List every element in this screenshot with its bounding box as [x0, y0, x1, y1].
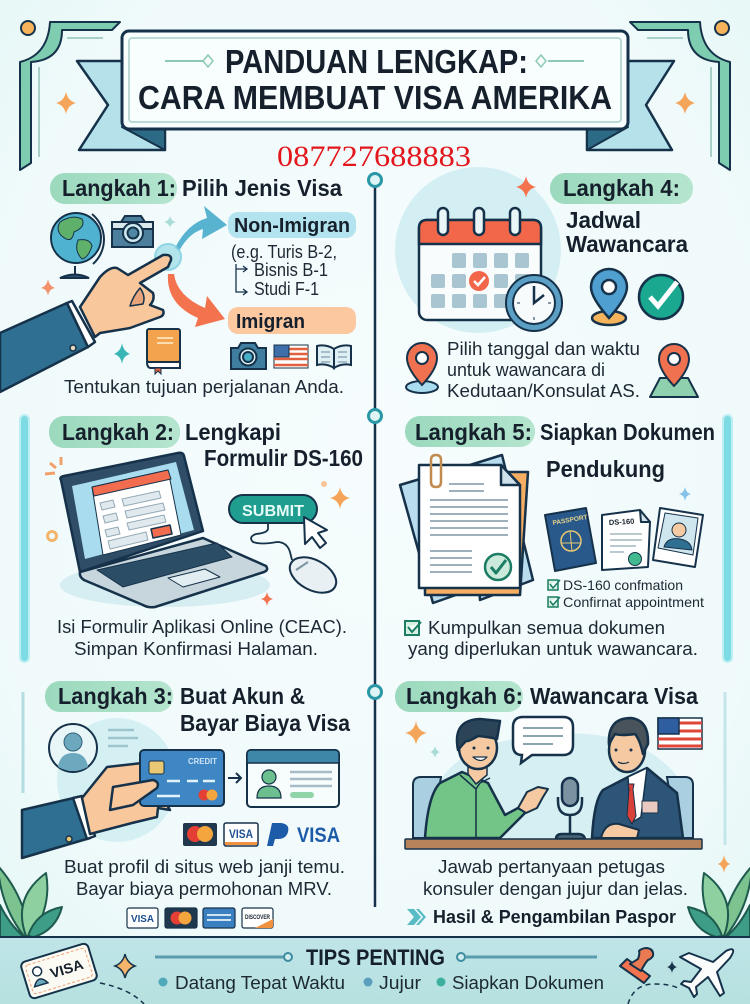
- step 4 caption: untuk wawancara di: [447, 360, 605, 380]
- shadow: [60, 563, 270, 607]
- text: visa examples: (e.g. Turis B-2,: [231, 242, 337, 262]
- icon: rubber stamp: [620, 948, 653, 983]
- icon: camera: [112, 216, 153, 247]
- side line: lower right: [724, 692, 726, 845]
- submit button: [229, 495, 317, 523]
- text: visa examples: Studi F-1: [254, 279, 319, 299]
- icon: profile: [49, 724, 138, 772]
- plant: bottom right: [688, 866, 750, 937]
- step 4 caption: Kedutaan/Konsulat AS.: [447, 381, 640, 401]
- corner ornament: top right: [630, 21, 730, 170]
- step 3 heading: Bayar Biaya Visa: [180, 710, 350, 736]
- panel: step 4: [395, 167, 698, 401]
- step 6 caption: konsuler dengan jujur dan jelas.: [423, 879, 688, 899]
- icon: credit card: CREDIT: [188, 757, 217, 766]
- plant: bottom left: [0, 866, 62, 937]
- icon: globe: [51, 213, 104, 278]
- icon: passport: [545, 508, 596, 571]
- text: visa examples: Bisnis B-1: [254, 260, 328, 280]
- icon: document stack: [400, 455, 533, 603]
- tips heading: [155, 945, 597, 970]
- sparkle: [516, 176, 536, 198]
- background circle: [395, 167, 561, 333]
- sparkle: [164, 216, 176, 228]
- side glow bar: right: [723, 415, 732, 662]
- icon: flag: [658, 718, 702, 749]
- text: visa examples: [231, 242, 337, 299]
- sparkle: [114, 343, 130, 364]
- step 2 heading: [49, 416, 363, 471]
- dashed path: [100, 983, 144, 1004]
- icon: map: [650, 344, 698, 397]
- label: Non-Imigran: Non-Imigran: [234, 215, 350, 237]
- step 1 caption: Tentukan tujuan perjalanan Anda.: [64, 377, 344, 397]
- step 3 heading: Langkah 3:: [58, 683, 173, 709]
- card logos row: VISA: [131, 914, 154, 925]
- icon: mouse: [251, 523, 342, 600]
- sparkle: [405, 721, 427, 745]
- card logos row: DISCOVER: [245, 914, 270, 921]
- icon: airplane: [680, 949, 733, 997]
- step 2 caption: Isi Formulir Aplikasi Online (CEAC).: [57, 617, 347, 637]
- icon: US flag: [274, 345, 308, 368]
- step 1 heading: Langkah 1:: [62, 175, 176, 201]
- icon: thumb over card: [110, 780, 158, 810]
- icon: open book: [317, 345, 351, 368]
- tips heading: TIPS PENTING: [306, 945, 445, 970]
- step 4 caption: Pilih tanggal dan waktu: [447, 339, 640, 359]
- highlight ring: [155, 244, 181, 270]
- arrow: to immigrant: [168, 274, 225, 327]
- step 4 heading: Wawancara: [566, 231, 688, 257]
- panel: step 6: [395, 681, 730, 927]
- icon: visa stamp card: [20, 943, 98, 999]
- scene background: [432, 733, 680, 840]
- card logos row: [127, 908, 273, 928]
- sparkle: [679, 487, 691, 501]
- checklist: [548, 577, 704, 610]
- background blob: [57, 718, 177, 842]
- sparkle small: [430, 746, 440, 758]
- step 5 caption: [405, 618, 698, 659]
- phone number: 087727688883: [277, 140, 471, 173]
- arrow: [228, 773, 241, 783]
- step 6 heading: Wawancara Visa: [530, 683, 698, 709]
- title line 2: CARA MEMBUAT VISA AMERIKA: [138, 79, 612, 116]
- step 2 caption: [57, 617, 347, 659]
- step 5 heading: [405, 416, 715, 482]
- step 6 heading: Langkah 6:: [406, 683, 523, 709]
- icon: browser profile: [247, 750, 339, 807]
- checklist: Confirnat appointment: [563, 594, 704, 610]
- step 4 heading: Jadwal: [566, 207, 641, 233]
- panel: step 1: [0, 173, 356, 397]
- step 4 heading: Langkah 4:: [563, 175, 680, 201]
- panel: step 3: [22, 681, 350, 928]
- title line 1: PANDUAN LENGKAP:: [225, 43, 528, 80]
- center timeline: [368, 174, 382, 907]
- side line: lower left: [22, 692, 24, 793]
- submit button: SUBMIT: [242, 503, 304, 520]
- icon: orange book: [147, 329, 180, 374]
- step 4 heading: [550, 173, 693, 257]
- payment logos: [183, 823, 340, 847]
- icon: passport: PASSPORT: [552, 514, 588, 527]
- speech bubble: [513, 717, 573, 763]
- step 1 heading: [50, 173, 342, 204]
- sparkle: [115, 954, 135, 978]
- sparkle: [667, 961, 677, 973]
- checklist: DS-160 confmation: [563, 577, 683, 593]
- step 3 heading: Buat Akun &: [180, 683, 305, 709]
- step 5 caption: Kumpulkan semua dokumen: [428, 618, 665, 638]
- tips list: Jujur: [379, 973, 421, 993]
- sparkle: [41, 279, 55, 296]
- icon: microphone: [556, 778, 585, 839]
- person: officer: [592, 718, 683, 838]
- icon: clock: [506, 275, 562, 331]
- label: Imigran: Imigran: [236, 311, 305, 333]
- icon: map pin orange: [406, 343, 438, 393]
- icon: hand holding card, sleeve: [22, 763, 170, 858]
- icon: check circle: [639, 275, 683, 319]
- title banner: [77, 31, 674, 150]
- sparkle small: [321, 481, 327, 487]
- side glow bar: left: [20, 415, 29, 662]
- step 6 caption: [423, 857, 688, 899]
- payment logos: VISA: [297, 824, 340, 847]
- sparkle: [261, 592, 273, 606]
- step 2 heading: Lengkapi: [185, 419, 281, 445]
- step 2 heading: Formulir DS-160: [204, 445, 363, 471]
- icon: ID photo: [653, 508, 703, 567]
- icon: DS-160 form: DS-160: [609, 517, 635, 527]
- icon: pointing hand: [0, 255, 171, 392]
- icon: calendar: [419, 208, 541, 320]
- footer band: tips: [0, 937, 750, 1004]
- step 2 caption: Simpan Konfirmasi Halaman.: [74, 639, 318, 659]
- sparkle: top right: [675, 92, 695, 114]
- sparkle: [330, 487, 350, 509]
- decorative ring: [48, 532, 56, 540]
- icon: camera small: [231, 343, 266, 369]
- dashed path: [628, 984, 678, 1004]
- step 6 caption: Jawab pertanyaan petugas: [438, 857, 665, 877]
- panel: step 5: [400, 416, 715, 659]
- tips list: Datang Tepat Waktu: [175, 973, 345, 993]
- icon: credit card: [140, 750, 224, 806]
- step 3 caption: [64, 857, 345, 899]
- label: Imigran: [228, 307, 356, 334]
- decorative rays: [45, 457, 61, 474]
- step 3 heading: [45, 681, 350, 736]
- result line: Hasil & Pengambilan Paspor: [433, 907, 676, 927]
- sparkle: [718, 855, 730, 873]
- step 5 caption: yang diperlukan untuk wawancara.: [408, 639, 698, 659]
- step 3 caption: Bayar biaya permohonan MRV.: [76, 879, 332, 899]
- tips list: [158, 973, 604, 993]
- step 2 heading: Langkah 2:: [62, 419, 174, 445]
- tips list: Siapkan Dokumen: [452, 973, 604, 993]
- panel: step 2: [45, 416, 363, 659]
- sparkle: top left: [56, 92, 76, 114]
- icon: laptop: [60, 453, 267, 607]
- desk: [405, 839, 702, 849]
- arrow: to non-immigrant: [175, 206, 227, 251]
- icon: cursor: [304, 517, 327, 548]
- step 5 heading: Langkah 5:: [415, 419, 532, 445]
- step 3 caption: Buat profil di situs web janji temu.: [64, 857, 345, 877]
- step 5 heading: Siapkan Dokumen: [540, 419, 715, 445]
- icon: map pin blue: [591, 269, 627, 325]
- payment logos: VISA: [229, 827, 253, 841]
- step 1 heading: Pilih Jenis Visa: [182, 175, 342, 201]
- icon: visa stamp card: VISA: [48, 956, 85, 981]
- step 5 heading: Pendukung: [546, 456, 665, 482]
- corner ornament: top left: [20, 21, 120, 170]
- step 6 heading: [395, 681, 698, 712]
- icon: DS-160 form: [602, 510, 650, 570]
- chairs: [413, 777, 693, 838]
- person: applicant: [425, 719, 548, 838]
- step 4 caption: [447, 339, 640, 401]
